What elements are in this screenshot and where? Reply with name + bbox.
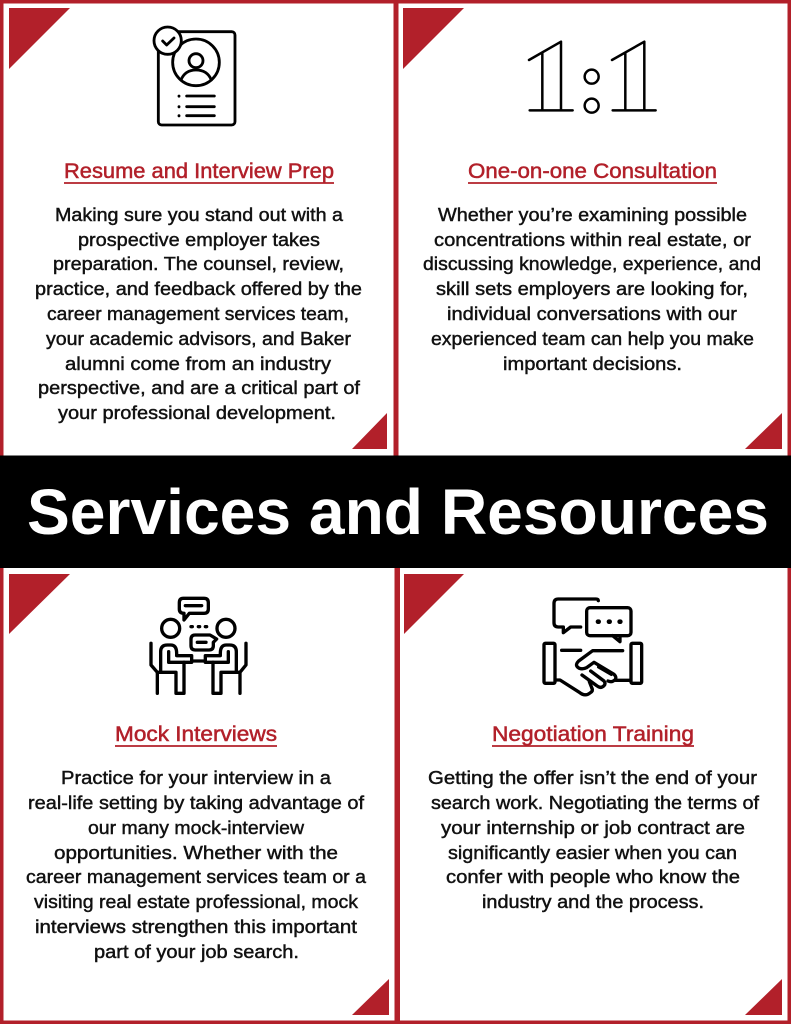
text block: significantly easier when you can xyxy=(448,842,737,863)
text block: industry and the process. xyxy=(482,891,704,912)
corner triangle top-left xyxy=(404,574,464,634)
text block: skill sets employers are looking for, xyxy=(436,278,748,299)
corner triangle top-left xyxy=(9,8,70,69)
text block xyxy=(423,204,761,374)
text block: alumni come from an industry xyxy=(65,353,332,374)
text block: concentrations within real estate, or xyxy=(434,229,751,250)
text block: career management services team or a xyxy=(26,866,367,887)
heading: Resume and Interview Prep xyxy=(64,160,334,183)
text block: practice, and feedback offered by the xyxy=(35,278,362,299)
text block: career management services team, xyxy=(47,303,349,324)
text block xyxy=(428,767,760,912)
text block: discussing knowledge, experience, and xyxy=(423,253,761,274)
title: Services and Resources xyxy=(27,476,769,548)
text block: Getting the offer isn’t the end of your xyxy=(428,767,757,788)
text block: individual conversations with our xyxy=(447,303,737,324)
text block: visiting real estate professional, mock xyxy=(34,891,359,912)
text block: your academic advisors, and Baker xyxy=(46,328,351,349)
text block: Practice for your interview in a xyxy=(61,767,332,788)
text block: your professional development. xyxy=(58,402,336,423)
text block: important decisions. xyxy=(503,353,682,374)
panel: resume and interview prep xyxy=(9,8,387,449)
text block: our many mock-interview xyxy=(88,817,305,838)
text block: your internship or job contract are xyxy=(441,817,745,838)
text block: opportunities. Whether with the xyxy=(54,842,338,863)
text block: Whether you’re examining possible xyxy=(438,204,747,225)
text block: perspective, and are a critical part of xyxy=(38,377,361,398)
corner triangle top-left xyxy=(9,574,70,634)
text block: Making sure you stand out with a xyxy=(55,204,344,225)
text block: experienced team can help you make xyxy=(431,328,754,349)
title band xyxy=(0,456,791,568)
icon: resume xyxy=(154,27,235,125)
panel: one-on-one consultation xyxy=(403,8,782,449)
corner triangle top-left xyxy=(403,8,464,69)
text block: search work. Negotiating the terms of xyxy=(431,792,760,813)
icon: two people at a table xyxy=(151,598,246,693)
text block: interviews strengthen this important xyxy=(35,916,357,937)
heading: Negotiation Training xyxy=(492,723,694,746)
heading: One-on-one Consultation xyxy=(468,160,717,183)
panel: mock interviews xyxy=(9,574,389,1015)
text block: confer with people who know the xyxy=(446,866,740,887)
text block xyxy=(35,204,362,423)
text block: prospective employer takes xyxy=(78,229,320,250)
corner triangle bottom-right xyxy=(745,413,782,449)
heading: Mock Interviews xyxy=(115,723,277,746)
text block: real-life setting by taking advantage of xyxy=(28,792,365,813)
text block: preparation. The counsel, review, xyxy=(53,253,344,274)
corner triangle bottom-right xyxy=(352,413,387,449)
corner triangle bottom-right xyxy=(745,979,782,1015)
text block: part of your job search. xyxy=(94,941,299,962)
icon: handshake with speech bubbles xyxy=(544,599,642,695)
corner triangle bottom-right xyxy=(352,979,389,1015)
icon: one to one xyxy=(529,42,656,113)
panel: negotiation training xyxy=(404,574,782,1015)
text block xyxy=(26,767,367,962)
